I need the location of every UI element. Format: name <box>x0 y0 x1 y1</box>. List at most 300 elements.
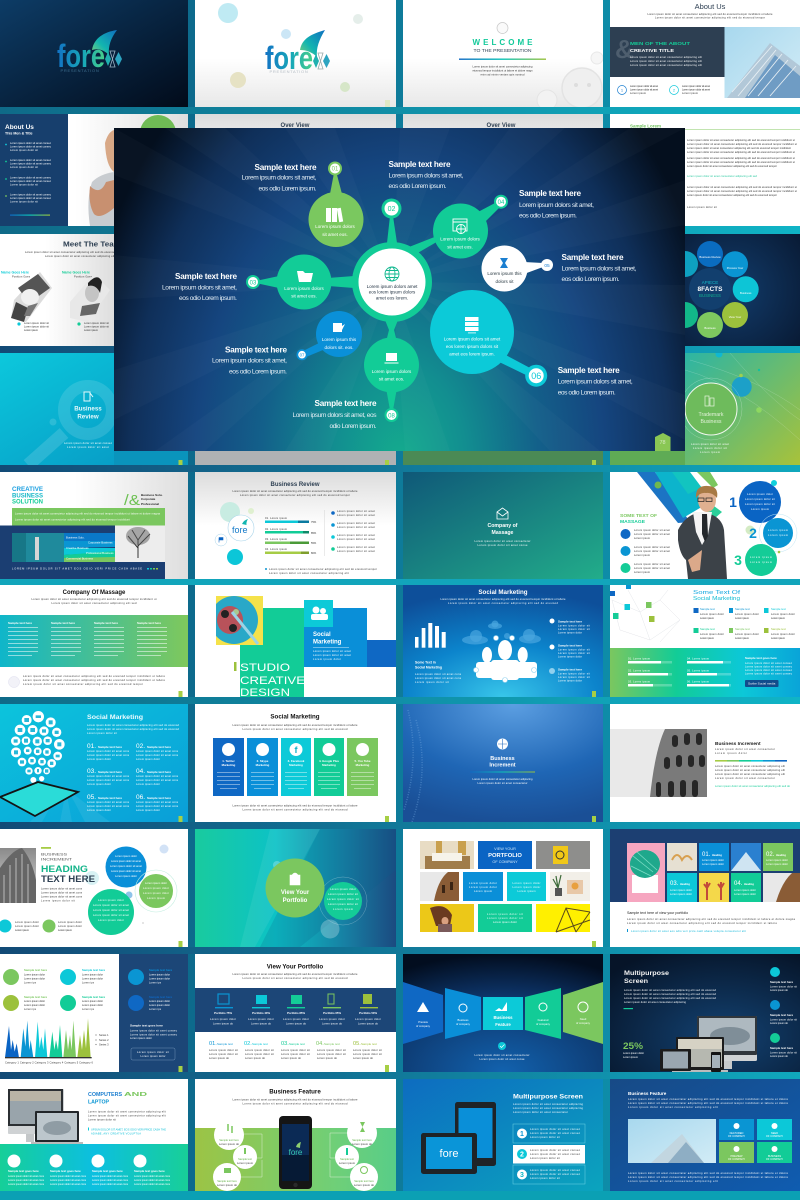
slide: meet the team <box>0 234 121 346</box>
slide: forex dark logo: PRESENTATION <box>61 68 99 73</box>
slide: text page: Lorem ipsum dolor sit amet consectetur adipiscing elit sed do eiusmod tempor incididunt ut <box>687 138 795 142</box>
slide: business feature phone: Lorem ipsum dolor sit amet consectetur adipiscing elit sed do eiusmod tempor incididunt ut labore <box>232 1098 358 1102</box>
slide: business review bars: Lorem ipsum dolor sit amet <box>337 537 375 541</box>
icon: hourglass <box>500 258 508 268</box>
slide: over view 1: Over View <box>281 123 310 129</box>
node: centre: amet eos lorem. <box>376 296 408 300</box>
node 01: 01 <box>332 166 339 172</box>
slide: business feature phone: Sample text here <box>354 1179 374 1183</box>
slide: welcome: eiusmod tempor incididunt ut labore et dolore magn <box>472 68 533 72</box>
slide: meet the team: Lorem ipsum dolor sit <box>84 324 109 328</box>
circle 1: Lorem ipsum <box>751 507 769 511</box>
node 07: Lorem ipsum this <box>322 337 357 342</box>
node 06: 06 <box>531 371 541 381</box>
callout 05 <box>562 253 637 283</box>
slide: portfolio tiles: Heading <box>776 854 786 857</box>
circle: blue: Lorem ipsum dolor sit amet <box>110 864 142 868</box>
node 06: eos lorem ipsum dolors sit <box>446 344 499 349</box>
photo: colosseum crop <box>763 873 800 902</box>
slide: chart with icons: Lorem ipsum dolor sit amet consec <box>130 1028 178 1032</box>
node 01: Lorem ipsum dolors <box>315 224 356 229</box>
panel: gradient band with bars: 06. Lorem ipsum <box>687 680 709 684</box>
slide: about us: Lorem ipsum dolor sit amet consectetur adipiscing elit <box>630 63 702 67</box>
slide: chart with icons: Lorem ipsum dolor <box>130 1036 152 1040</box>
slide: about us: Lorem ipsum dolor sit amet <box>630 88 658 92</box>
slide: about us man <box>0 114 188 226</box>
slide: multipurpose screen devices <box>610 954 800 1072</box>
slide: social marketing people: Lorem ipsum dolor sit <box>415 680 449 684</box>
circle 1: Lorem ipsum dolor <box>747 492 773 496</box>
slide: view your portfolio band: 02. <box>244 1041 252 1047</box>
slide: 8 facts: Business <box>704 326 716 330</box>
photo: team member 1 <box>11 272 52 322</box>
slide: business review bars: Lorem ipsum dolor sit amet <box>337 521 375 525</box>
slide: business review bars: Lorem ipsum dolor sit amet <box>337 549 375 553</box>
slide: view your portfolio band: Lorem ipsum do <box>317 1056 338 1060</box>
slide: social marketing network: Social Marketing <box>693 596 740 602</box>
panel: navy band with five portfolio items: Portfolio 40% <box>252 1011 270 1015</box>
slide: computers and laptop <box>0 1079 188 1191</box>
circle 3: 3 <box>734 552 742 568</box>
panel: gradient band with bars: 01. Lorem ipsum <box>628 656 650 660</box>
slide: over view 1 <box>195 114 396 226</box>
callout 07 <box>212 346 287 376</box>
callout 06: Lorem ipsum dolors sit amet, <box>558 378 633 386</box>
slide: view your portfolio band: Lorem ipsum dolor sit amet consectetur adipiscing elit sed do eiusmod <box>242 976 348 980</box>
slide: social marketing balloon: 01. <box>87 743 96 750</box>
node 02 pin: 02 <box>388 206 395 213</box>
slide: over view 2: Over View <box>487 123 516 129</box>
slide: portfolio tiles: Lorem ipsum dolor <box>670 888 692 892</box>
circle: green with ring: Lorem ipsum dolor <box>143 886 169 890</box>
slide: creative business solution: CREATIVE <box>12 487 43 493</box>
slide: about us man: Lorem ipsum dolor sit amet consec <box>10 179 52 183</box>
slide: chart with icons: Lorem ips <box>149 980 162 984</box>
circle 1: Lorem ipsum dolor sit <box>745 502 775 506</box>
slide: business feature phone: Lorem ipsum do <box>219 1142 240 1146</box>
panel: business feature: Business <box>493 1015 513 1020</box>
photo: bedroom <box>420 841 474 869</box>
slide: business feature phone: Sample text <box>238 1157 252 1161</box>
circle: blue: Lorem ipsum dolor sit amet <box>111 869 141 873</box>
panel: need of company: of company <box>576 1021 591 1025</box>
slide: social marketing balloon: Social Marketing <box>87 715 143 721</box>
photo: blue pyramid <box>731 843 761 871</box>
slide: multipurpose screen devices: 25% <box>623 1041 643 1051</box>
slide: over view 2 <box>403 114 603 226</box>
circle: teal: Lorem ipsum dolor sit amet <box>93 908 129 912</box>
slide: business feature phone: Lorem ipsum dolor sit amet consectetur adipiscing elit sed do eiusmod <box>242 1102 348 1106</box>
node 06: amet eos lorem ipsum. <box>449 352 495 356</box>
slide: about us: Lorem ipsum dolor sit amet consectetur adipiscing elit <box>630 59 702 63</box>
slide: business increment colosseum: Lorem ipsum dolor sit amet consectetur adipiscing elit <box>715 764 785 768</box>
background rays <box>114 128 685 451</box>
slide: heading text here: Lorem ipsum dolor sit amet cons <box>41 886 83 890</box>
card: twitter: 1. Twitter <box>222 759 236 763</box>
slide: creative business solution: Professional <box>141 502 159 506</box>
icon: large tablet <box>455 1102 496 1166</box>
slide: company of massage band: Lorem ipsum dolor sit amet consectetur adipiscing elit sed <box>52 601 137 605</box>
slide: computers and laptop: Lorem ipsum dolor sit amet cons <box>92 1182 129 1186</box>
slide: business feature tiles: Lorem ipsum dolor sit amet consectetur adipiscing elit sed do eiusmod tempor incididunt ut labore et dolore <box>628 1101 789 1105</box>
slide: text page <box>610 114 800 226</box>
slide: social marketing people: Lorem ipsum dolor sit amet consectetur adipiscing elit sed do eiusmod <box>448 601 559 605</box>
slide: heading text here: Lorem ipsum dolor sit amet cons <box>41 894 83 898</box>
icon: magnifier <box>28 386 112 465</box>
node 04: sit amet eos. <box>447 244 473 250</box>
slide: social marketing balloon <box>0 704 188 822</box>
circle: teal: Lorem ipsum dolor <box>98 918 124 922</box>
photo: yellow cube <box>536 841 590 869</box>
slide: company of massage band: Lorem ipsum dolor sit amet consectetur adipiscing elit sed do eiusmod tempor incididunt ut labore <box>23 674 166 678</box>
slide: social marketing blocks: Lorem ipsum dolor sit amet <box>313 649 351 653</box>
list item 1: Lorem ipsum dolor sit amet consec <box>530 1127 581 1131</box>
slide: about us: Lorem ipsum <box>630 91 646 95</box>
circle: text: Lorem ipsum dolor sit <box>328 892 358 896</box>
slide: multipurpose screen devices: Multipurpose <box>624 970 670 977</box>
slide: computers and laptop: Sample text goes here <box>50 1169 81 1173</box>
circle: text <box>324 882 362 920</box>
heading: studio creative design: CREATIVE <box>240 675 305 687</box>
slide: welcome: TO THE PRESENTATION <box>474 48 532 53</box>
slide: chart with icons: Sample text here <box>82 995 106 999</box>
slide: about us: Lorem ipsum dolor sit amet <box>682 88 710 92</box>
slide: text page: Lorem ipsum dolor sit amet consectetur adipiscing elit sed do eiusmod tempor incididunt ut <box>687 150 795 154</box>
slide: computers and laptop: Sample text goes here <box>134 1169 165 1173</box>
slide: company of massage band: Lorem ipsum dolor sit amet consectetur adipiscing elit sed do eiusmod tempor <box>23 682 143 686</box>
list item 3: Lorem ipsum dolor sit amet consec <box>530 1168 581 1172</box>
node 07 <box>296 311 362 360</box>
slide: computers and laptop: Lorem ipsum dolor sit amet consectetur adipiscing elit <box>88 1110 166 1114</box>
slide: creative business solution: Lorem ipsum dolor sit amet consectetur adipiscing elit sed do eiusmod tempor incididunt ut labore et dolore magna <box>15 512 161 516</box>
callout 03: eos odio Lorem ipsum. <box>179 295 237 302</box>
slide: forex dark logo <box>0 0 188 107</box>
slide: social marketing blocks: Social <box>313 632 331 638</box>
slide: business feature phone: Sample text here <box>352 1138 372 1142</box>
list: colour ribbons <box>64 533 115 562</box>
slide: computers and laptop: Lorem ipsum dolor sit amet cons <box>8 1182 45 1186</box>
callout 04: Lorem ipsum dolors sit amet, <box>519 202 594 209</box>
card: google plus: 4. Google Plus <box>319 759 339 763</box>
list item 3: 3 <box>520 1172 524 1179</box>
slide: computers and laptop: Lorem ipsum dolor sit amet consectetur adipiscing elit <box>88 1114 166 1118</box>
slide: social marketing balloon: Lorem ipsum dolor sit amet consectetur adipiscing elit sed do eiusmod <box>87 727 180 731</box>
slide: business review bars: Lorem ipsum dolor sit amet <box>337 545 375 549</box>
icon: small tablet: fore <box>440 1148 458 1160</box>
slide: business review cyan <box>0 353 114 465</box>
slide: social marketing balloon: Sample text here <box>147 745 171 749</box>
slide: view your portfolio band: 03. <box>281 1041 289 1047</box>
slide: social marketing balloon: 02. <box>136 743 145 750</box>
slide: man with circles: Lorem ipsum dolor sit amet <box>634 549 670 553</box>
slide: social marketing balloon: 05. <box>87 794 96 801</box>
panel: gradient band with bars: Lorem ipsum dolor sit amet consec <box>745 664 793 668</box>
slide: business review bars: Lorem ipsum dolor sit amet <box>337 525 375 529</box>
slide: social marketing people: Lorem ipsum dolor sit <box>558 648 590 652</box>
circle: green with ring: Lorem ipsum dolor <box>143 891 169 895</box>
node 05 <box>482 246 553 292</box>
slide: heading text here: Lorem ipsum <box>15 928 29 932</box>
card: google plus <box>314 738 344 796</box>
slide: company of massage teal: Company of <box>488 523 518 529</box>
node: centre <box>352 242 432 322</box>
slide: social marketing balloon: Lorem ipsum dolor sit amet cons <box>136 800 179 804</box>
slide: business review bars: Lorem ipsum dolor sit amet <box>337 533 375 537</box>
slide: portfolio tiles: 03. <box>670 881 679 887</box>
slide: meet the team: Meet The Team <box>63 240 121 248</box>
list item 1: Lorem ipsum dolor sit <box>530 1135 560 1139</box>
node 08 <box>364 338 419 422</box>
list item 1: Lorem ipsum dolor sit amet consec <box>530 1131 581 1135</box>
slide: social marketing network: Lorem ipsum <box>735 636 749 640</box>
slide: computers and laptop: Lorem ipsum dolor sit amet cons <box>8 1178 45 1182</box>
photo: hands on yellow <box>699 873 729 902</box>
node 04: 04 <box>498 200 505 206</box>
slide: business feature tiles: Lorem ipsum dolor sit amet consectetur adipiscing elit sed do eiusmod tempor incididunt ut labore et dolore <box>628 1171 789 1175</box>
slide: portfolio tiles: 02. <box>766 852 775 858</box>
callout 07: eos odio Lorem ipsum. <box>229 368 287 376</box>
panel: navy band with five portfolio items: Lorem ipsum dolor <box>248 1017 274 1021</box>
icon: laptop <box>672 1037 728 1072</box>
card: youtube: Marketing <box>356 763 370 767</box>
slide: social marketing people <box>403 585 603 697</box>
panel: navy band with five portfolio items: Portfolio 65% <box>323 1011 341 1015</box>
panel: gradient band with bars: 03. Lorem ipsum <box>628 680 650 684</box>
slide: social marketing balloon: Lorem ipsum dolor sit amet cons <box>87 778 130 782</box>
slide: portfolio grid: Lorem ipsum dolor sit <box>487 912 523 916</box>
slide: 8 facts <box>685 234 800 346</box>
list item 3: Lorem ipsum dolor sit amet consec <box>530 1172 581 1176</box>
icon: monitor <box>697 1016 757 1069</box>
slide: social marketing cards: Lorem ipsum dolor sit amet consectetur adipiscing elit sed do eiusmod tempor incididunt ut labore <box>232 804 358 808</box>
icon: tablet <box>660 1049 691 1071</box>
slide: computers and laptop: AND <box>124 1092 147 1098</box>
slide: about us man: Lorem ipsum dolor sit amet consec <box>10 141 52 145</box>
slide: chart with icons: Lorem ipsum dolor <box>82 976 103 980</box>
slide: about us: & <box>615 34 634 64</box>
panel: gradient band with bars: Sample text goes here <box>745 656 777 660</box>
slide: social marketing balloon: Lorem ipsum dolor sit amet cons <box>136 774 179 778</box>
list item 2 <box>513 1145 585 1164</box>
slide: text page: Lorem ipsum dolor sit amet consectetur adipiscing elit sed do eiusmod tempor incididunt <box>687 146 791 150</box>
list item 2: Lorem ipsum dolor sit amet consec <box>530 1148 581 1152</box>
node 03: 03 <box>250 280 257 286</box>
slide: multipurpose screen tablets: Lorem ipsum dolor sit amet consectetur <box>513 1110 568 1114</box>
chart: progress bars: 80% <box>311 551 317 555</box>
slide: computers and laptop: COMPUTERS <box>88 1092 122 1098</box>
slide: meet the team: Lorem ipsum <box>24 328 38 332</box>
slide: business increment colosseum: Lorem ipsum dolor sit amet consectetur <box>715 776 775 780</box>
logo badge <box>228 515 254 541</box>
slide: social marketing network: Lorem ipsum <box>700 636 714 640</box>
slide: computers and laptop: Sample text goes here <box>92 1169 123 1173</box>
heading: welcome: WELCOME <box>472 38 533 47</box>
slide: social marketing blocks <box>195 585 396 699</box>
slide: about us: Lorem ipsum dolor sit amet <box>682 84 710 88</box>
slide: social marketing network: Sample text <box>735 627 750 631</box>
callout 05: eos odio Lorem ipsum. <box>562 276 620 283</box>
slide: trademark business: Lorem ipsum dolor sit amet <box>691 442 729 446</box>
tile: view your portfolio: VIEW YOUR <box>494 847 516 851</box>
slide: about us man: Lorem ipsum dolor sit <box>10 148 38 152</box>
slide: meet the team: Lorem ipsum <box>84 328 98 332</box>
slide: creative business solution: LOREM IPSUM DOLOR SIT AMET EOS ODIO VERI PRICE CASH ABASE <box>12 566 142 570</box>
chart: progress bars: 03. Lorem ipsum <box>265 537 287 541</box>
photo: team member 2 <box>70 276 102 319</box>
slide: social marketing people: Lorem ipsum dolor sit <box>558 624 590 628</box>
circle: teal <box>88 889 134 935</box>
circle: blue: Lorem ipsum dolor sit amet <box>111 859 141 863</box>
panel: navy band with five portfolio items: Lorem ipsum do <box>322 1022 343 1026</box>
slide: social marketing blocks: Marketing <box>313 640 342 646</box>
panel: featured of company: Featured <box>538 1018 549 1022</box>
slide: text page: Sample Lorem <box>630 124 661 128</box>
callout 01: eos odio Lorem ipsum. <box>258 186 317 192</box>
slide: about us: CREATIVE TITLE <box>630 48 674 53</box>
slide: chart with icons: Lorem ipsum dolor <box>149 972 170 976</box>
icon: people group <box>474 636 537 682</box>
panel: gradient band with bars: Lorem ipsum dolor sit amet consec <box>745 661 793 665</box>
slide: business review cyan: Review <box>77 414 99 420</box>
slide: view your portfolio band: Lorem ipsum dolor sit <box>209 1048 238 1052</box>
slide: social marketing cards: Lorem ipsum dolor sit amet consectetur adipiscing elit sed do eiusmod <box>242 808 348 812</box>
tile: view your portfolio <box>478 841 532 869</box>
slide: welcome: enim ad minim veniam quis nostrud <box>480 72 525 76</box>
slide: business feature panels: Lorem ipsum dolor sit amet conse <box>480 1057 525 1061</box>
callout 01: Lorem ipsum dolors sit amet, <box>242 174 317 182</box>
slide: business review bars <box>195 472 396 579</box>
slide: business increment colosseum <box>610 704 800 822</box>
circle 1: Lorem ipsum dolor sit <box>745 497 775 501</box>
photo: man in cardigan <box>678 486 727 579</box>
slide: business feature tiles: OF COMPANY <box>728 1134 745 1138</box>
slide: view your portfolio band: Sample text <box>324 1042 340 1046</box>
slide: company of massage teal: Massage <box>492 530 514 536</box>
slide: portfolio grid: Lorem ipsum dolor <box>469 881 497 885</box>
slide: portfolio tiles: Lorem ipsum dolor <box>734 888 756 892</box>
slide: social marketing network: Lorem ipsum dolor <box>771 632 795 636</box>
heading: studio creative design: STUDIO <box>240 662 291 674</box>
slide: social marketing cards: Lorem ipsum dolor sit amet consectetur adipiscing elit sed do eiusmod tempor incididunt ut labore <box>232 723 358 727</box>
slide: social marketing balloon: Sample text here <box>98 770 122 774</box>
callout 08 <box>292 399 377 430</box>
photo: building <box>724 27 800 98</box>
slide: business increment colosseum: Business Increment <box>715 741 761 747</box>
slide: about us <box>610 0 800 107</box>
node 08: sit amet eos. <box>379 376 404 382</box>
slide: heading text here: INCREMENT <box>41 856 73 862</box>
panel: business feature: Feature <box>495 1022 511 1027</box>
callout 04: Sample text here <box>519 189 581 198</box>
slide: chart with icons: Lorem ips <box>24 1007 37 1011</box>
slide: company of massage teal: Lorem ipsum dolor sit amet consectetur <box>474 539 531 543</box>
slide: text page: Lorem ipsum dolor sit amet consectetur adipiscing elit sed do eiusmod tempor incididunt ut <box>687 189 797 193</box>
slide: social marketing people: Lorem ipsum dolor sit <box>558 627 590 631</box>
slide: portfolio tiles: Heading <box>744 883 754 886</box>
callout 02: eos odio Lorem ipsum. <box>388 183 447 190</box>
slide: about us man: Lorem ipsum dolor sit <box>10 165 38 169</box>
callout 06 <box>558 366 633 396</box>
slide: chart with icons: Lorem ips <box>24 980 37 984</box>
icon: people <box>304 600 333 627</box>
circle 1 <box>729 480 781 523</box>
slide: business feature tiles: Lorem ipsum dolor sit amet consectetur adipiscing elit <box>628 1105 718 1109</box>
slide: business feature tiles: OF COMPANY <box>766 1134 783 1138</box>
slide: computers and laptop: LAPTOP <box>88 1100 109 1106</box>
slide: social marketing network: Lorem ipsum <box>700 616 714 620</box>
slide: multipurpose screen devices: Lorem ipsum <box>623 1055 638 1059</box>
slide: creative business solution: Lorem ipsum dolor sit amet consectetur adipiscing elit sed do eiusmod tempor incididunt <box>15 518 130 522</box>
slide: social marketing network: Lorem ipsum dolor <box>735 612 759 616</box>
list item 1: 1 <box>520 1131 524 1138</box>
chart: progress bars: 55% <box>311 541 317 545</box>
slide: social marketing network <box>610 585 800 697</box>
slide: social marketing people: Lorem ipsum dolor <box>558 654 582 658</box>
panel: navy band with five portfolio items: Portfolio 75% <box>214 1011 232 1015</box>
slide: about us man: About Us <box>5 124 34 131</box>
slide: multipurpose screen devices: Lorem ipsum do <box>770 988 789 992</box>
slide: chart with icons: Lorem ipsum dolor <box>82 1003 103 1007</box>
slide: meet the team: Lorem ipsum dolor sit amet consectetur adipiscing elit <box>45 254 115 258</box>
slide: chart with icons: Lorem ips <box>82 1007 95 1011</box>
slide: chart with icons: Lorem ipsum dolor <box>82 999 103 1003</box>
slide: business increment blue: Increment <box>489 762 516 768</box>
slide: chart with icons: Category 1 Category 2 Category 3 Category 4 Category 5 Category 6 <box>5 1060 94 1064</box>
circle 2 <box>746 514 797 552</box>
slide: portfolio tiles: Lorem ipsum dolor <box>702 862 724 866</box>
circle 2: 2 <box>749 525 757 541</box>
callout 02 <box>388 160 464 190</box>
slide: meet the team: Lorem ipsum dolor sit <box>84 321 109 325</box>
node 07: 07 <box>300 352 305 357</box>
card: facebook: Marketing <box>289 763 303 767</box>
slide: business feature phone: Sample text here <box>219 1138 239 1142</box>
panel: navy band with five portfolio items: Portfolio 85% <box>287 1011 305 1015</box>
slide: man with circles: Lorem ipsum dolor sit amet <box>634 545 670 549</box>
slide: meet the team: Name Goes Here <box>1 270 29 274</box>
slide: about us: Lorem ipsum <box>682 91 698 95</box>
slide: chart with icons: Sample text here <box>24 968 48 972</box>
card: skype <box>247 738 278 796</box>
slide: company of massage teal: Lorem ipsum dolor sit amet conse <box>478 543 528 547</box>
slide: man with circles: Lorem ipsum dolor sit amet <box>634 566 670 570</box>
heading: studio creative design: DESIGN <box>240 687 290 699</box>
node 06: Lorem ipsum dolors sit amet <box>444 336 501 342</box>
slide: social marketing people: Lorem ipsum dolor sit amet consectetur adipiscing elit sed do eiusmod tempor incididunt ut labore <box>440 597 566 601</box>
slide: business feature tiles: Lorem ipsum dolor sit amet consectetur adipiscing elit sed do eiusmod tempor incididunt ut labore et dolore <box>628 1175 789 1179</box>
slide: about us man: Lorem ipsum dolor sit amet consec <box>10 162 52 166</box>
slide: social marketing people: Lorem ipsum dolor sit <box>558 675 590 679</box>
slide: view your portfolio band: Lorem ipsum do <box>281 1056 302 1060</box>
icon: balloon of social circles <box>11 711 65 783</box>
list: colour ribbons: Commercial Business <box>66 556 94 560</box>
main panel: mind map infographic <box>114 128 685 451</box>
slide: view your portfolio band: Lorem ipsum dolor sit <box>281 1052 310 1056</box>
callout 04: eos odio Lorem ipsum. <box>519 212 577 220</box>
slide: about us man: Lorem ipsum dolor sit amet consec <box>10 192 52 196</box>
slide: social marketing balloon: Lorem ipsum dolor sit amet consectetur adipiscing elit sed do eiusmod <box>87 723 180 727</box>
slide: man with circles: SOME TEXT OF <box>620 513 657 518</box>
slide: social marketing balloon: Lorem ipsum dolor sit amet cons <box>136 749 179 753</box>
slide: portfolio grid: Lorem ipsum dolor <box>493 920 517 924</box>
slide: business feature tiles: Lorem ipsum dolor sit amet consectetur adipiscing elit sed do eiusmod tempor incididunt ut labore et dolore <box>628 1097 789 1101</box>
slide: social marketing balloon: Lorem ipsum dolor sit amet cons <box>136 804 179 808</box>
slide: about us man: Lorem ipsum dolor sit amet consec <box>10 196 52 200</box>
slide: business increment blue: Lorem ipsum dolor sit amet consectetur <box>478 781 528 785</box>
circle: blue <box>106 846 146 888</box>
page number tab <box>655 433 670 451</box>
slide: meet the team: Name Goes Here <box>62 270 90 274</box>
